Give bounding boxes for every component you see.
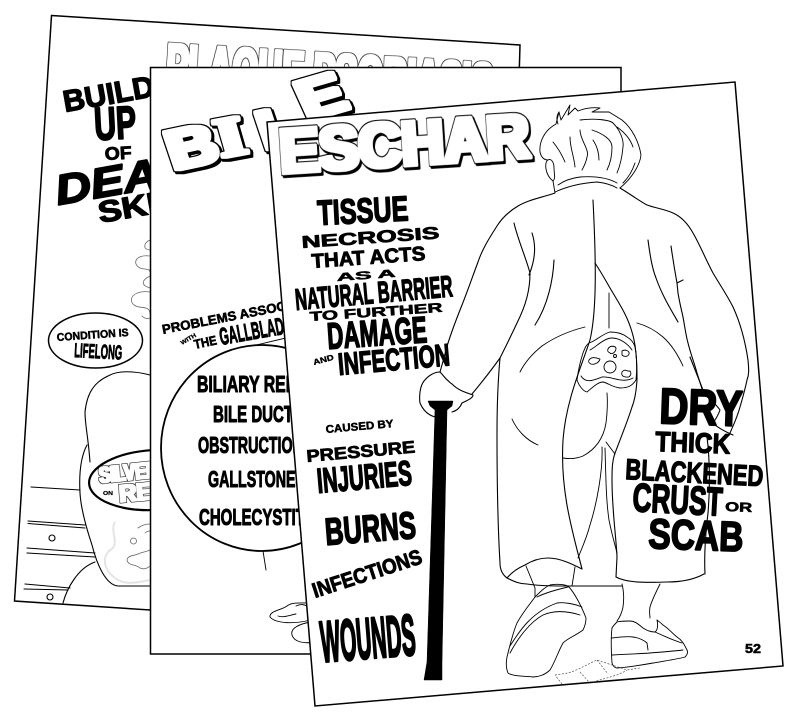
wound: eschar patch bbox=[577, 332, 637, 392]
panel: back page plaque psoriasis bbox=[14, 16, 520, 610]
panel: front page eschar bbox=[267, 82, 783, 706]
text: problems associated with the gallbladder: WITH bbox=[180, 333, 198, 347]
text: causes list: BURNS bbox=[323, 505, 417, 554]
callout: list of bile problems: CHOLECYSTITIS bbox=[199, 504, 319, 530]
eschar page sheet bbox=[267, 82, 783, 706]
callout: silvery scales on red bbox=[88, 447, 222, 513]
hair and head bbox=[540, 105, 641, 193]
panel: front page eschar: WOUNDS bbox=[318, 603, 418, 675]
text: causes list bbox=[306, 418, 425, 675]
icon: plaque squiggles bbox=[131, 240, 150, 318]
text: dry thick blackened crust or scab: SCAB bbox=[648, 510, 744, 560]
callout: silvery scales on red: RED bbox=[118, 477, 170, 508]
cane bbox=[424, 401, 453, 680]
back page sheet bbox=[14, 16, 520, 610]
heading: bile: I bbox=[209, 106, 252, 169]
page number: 52 bbox=[745, 641, 761, 656]
text: definition: AS A bbox=[336, 268, 396, 284]
text: causes list: CAUSED BY bbox=[325, 418, 395, 436]
text: causes list: INJURIES bbox=[315, 454, 413, 501]
text: causes list: INFECTIONS bbox=[309, 546, 425, 603]
legs and folds bbox=[512, 293, 683, 621]
illustration: patient torso bbox=[80, 372, 150, 586]
text: build up of dead skin: OF bbox=[104, 143, 132, 164]
left shoe bbox=[506, 584, 586, 677]
callout: list of bile problems: BILE DUCT bbox=[213, 401, 293, 427]
text: definition bbox=[294, 189, 454, 382]
callout: silvery scales on red: SILVERY bbox=[98, 456, 170, 488]
callout: list of bile problems: GALLSTONES bbox=[208, 466, 305, 492]
heading: plaque psoriasis: PLAQUE PSORIASIS bbox=[164, 32, 495, 121]
text: problems associated with the gallbladder: THE bbox=[193, 332, 218, 352]
illustration: floor bandage bbox=[555, 660, 640, 684]
text: dry thick blackened crust or scab: THICK bbox=[655, 426, 731, 460]
illustration: patient in gown with cane bbox=[420, 105, 749, 680]
callout: list of bile problems: OBSTRUCTION bbox=[198, 432, 303, 458]
callout: list of bile problems: BILIARY REFLUX bbox=[197, 371, 327, 397]
heading: bile: L bbox=[249, 94, 310, 162]
text: problems associated with the gallbladder: PROBLEMS ASSOCIATED bbox=[161, 291, 326, 337]
text: definition: TO FURTHER bbox=[309, 300, 444, 324]
text: dry thick blackened crust or scab: CRUST bbox=[632, 476, 724, 525]
text: dry thick blackened crust or scab: DRY bbox=[659, 378, 744, 437]
text: definition: THAT ACTS bbox=[311, 243, 426, 273]
callout: condition is lifelong: CONDITION IS bbox=[56, 327, 129, 344]
text: definition: DAMAGE bbox=[326, 309, 428, 357]
text: build up of dead skin: BUILD bbox=[60, 70, 157, 119]
text: build up of dead skin: UP bbox=[93, 96, 137, 150]
illustration: bile puddles bbox=[270, 603, 315, 643]
text: definition: NECROSIS bbox=[301, 223, 440, 252]
text: build up of dead skin bbox=[51, 70, 197, 230]
text: build up of dead skin: DEAD bbox=[51, 143, 197, 214]
right shoe bbox=[611, 620, 688, 668]
callout: condition is lifelong: LIFELONG bbox=[74, 340, 123, 365]
text: causes list: PRESSURE bbox=[306, 438, 416, 466]
hand on cane bbox=[420, 372, 473, 417]
text: dry thick blackened crust or scab: OR bbox=[725, 499, 753, 515]
text: definition: INFECTION bbox=[337, 337, 451, 382]
heading: bile: B bbox=[158, 113, 226, 182]
text: definition: NATURAL BARRIER bbox=[294, 270, 454, 317]
heading: bile: E bbox=[287, 62, 356, 132]
callout: condition is lifelong bbox=[48, 313, 142, 368]
illustration: plaque patches bbox=[105, 522, 150, 583]
text: definition: AND bbox=[312, 353, 335, 367]
panel: middle page bile bbox=[150, 62, 621, 654]
heading: eschar: ESCHAR bbox=[278, 102, 531, 187]
text: definition: TISSUE bbox=[316, 189, 409, 233]
text: dry thick blackened crust or scab bbox=[625, 378, 764, 560]
illustration: bench lines bbox=[24, 487, 95, 603]
callout: silvery scales on red: ON bbox=[103, 491, 113, 497]
callout: list of bile problems bbox=[161, 337, 363, 570]
text: problems associated with the gallbladder: GALLBLADDER bbox=[217, 309, 311, 351]
text: build up of dead skin: SKIN bbox=[95, 183, 185, 230]
gown outline bbox=[440, 188, 749, 586]
bile page sheet bbox=[150, 68, 621, 654]
